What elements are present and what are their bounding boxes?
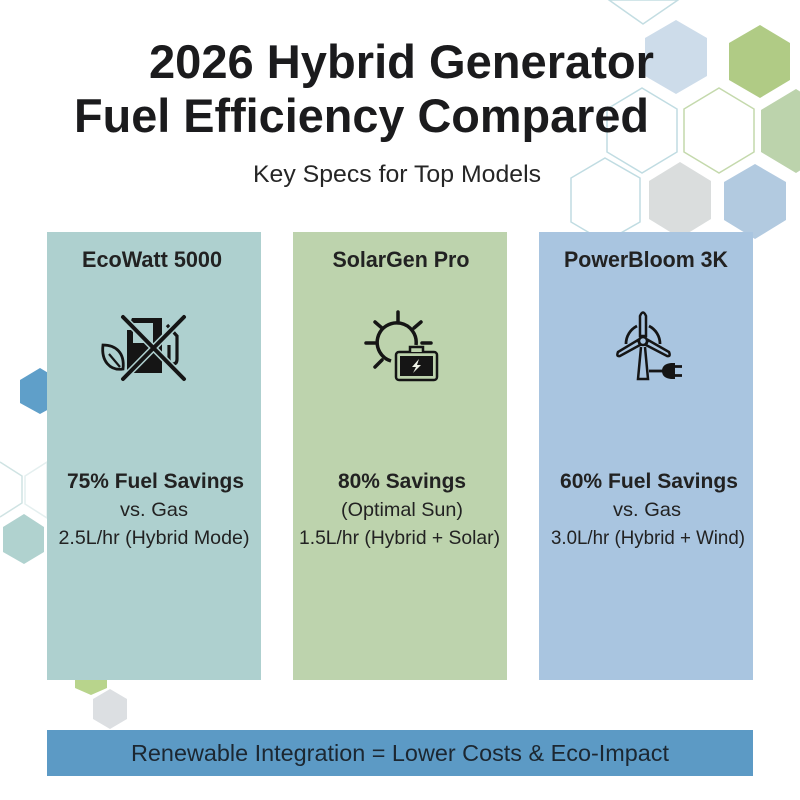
icon: sun and battery: [366, 312, 437, 380]
text: EcoWatt stats: 75% Fuel Savings: [67, 470, 244, 493]
decorative hexagons: left side: [0, 368, 127, 729]
text: EcoWatt stats: [58, 470, 250, 549]
panel: EcoWatt 5000: [47, 232, 261, 680]
footer banner: [47, 730, 753, 776]
text: SolarGen stats: [299, 470, 500, 549]
panel: SolarGen Pro: [293, 232, 507, 680]
footer text: Renewable Integration = Lower Costs & Eco-Impact: [131, 740, 670, 766]
text: PowerBloom stats: [551, 470, 745, 549]
heading: EcoWatt 5000: EcoWatt 5000: [82, 247, 222, 272]
text: PowerBloom stats: 60% Fuel Savings: [560, 470, 738, 493]
heading: PowerBloom 3K: PowerBloom 3K: [564, 247, 728, 272]
text: PowerBloom stats: vs. Gas: [613, 499, 681, 521]
panel: PowerBloom 3K: [539, 232, 753, 680]
icon: crossed-out fuel pump and leaf: [103, 317, 184, 379]
subtitle: Key Specs for Top Models: [253, 161, 541, 188]
icon: wind turbine with plug: [617, 312, 682, 379]
title: [74, 35, 654, 142]
title: 2026 Hybrid Generator: [149, 35, 654, 88]
text: EcoWatt stats: vs. Gas: [120, 499, 188, 521]
text: EcoWatt stats: 2.5L/hr (Hybrid Mode): [58, 527, 250, 549]
text: SolarGen stats: 1.5L/hr (Hybrid + Solar): [299, 527, 500, 549]
decorative hexagons: top right: [571, 0, 800, 242]
text: SolarGen stats: 80% Savings: [338, 470, 466, 493]
text: SolarGen stats: (Optimal Sun): [341, 499, 463, 521]
heading: SolarGen Pro: SolarGen Pro: [332, 247, 470, 272]
title: Fuel Efficiency Compared: [74, 89, 649, 142]
text: PowerBloom stats: 3.0L/hr (Hybrid + Wind): [551, 527, 745, 549]
